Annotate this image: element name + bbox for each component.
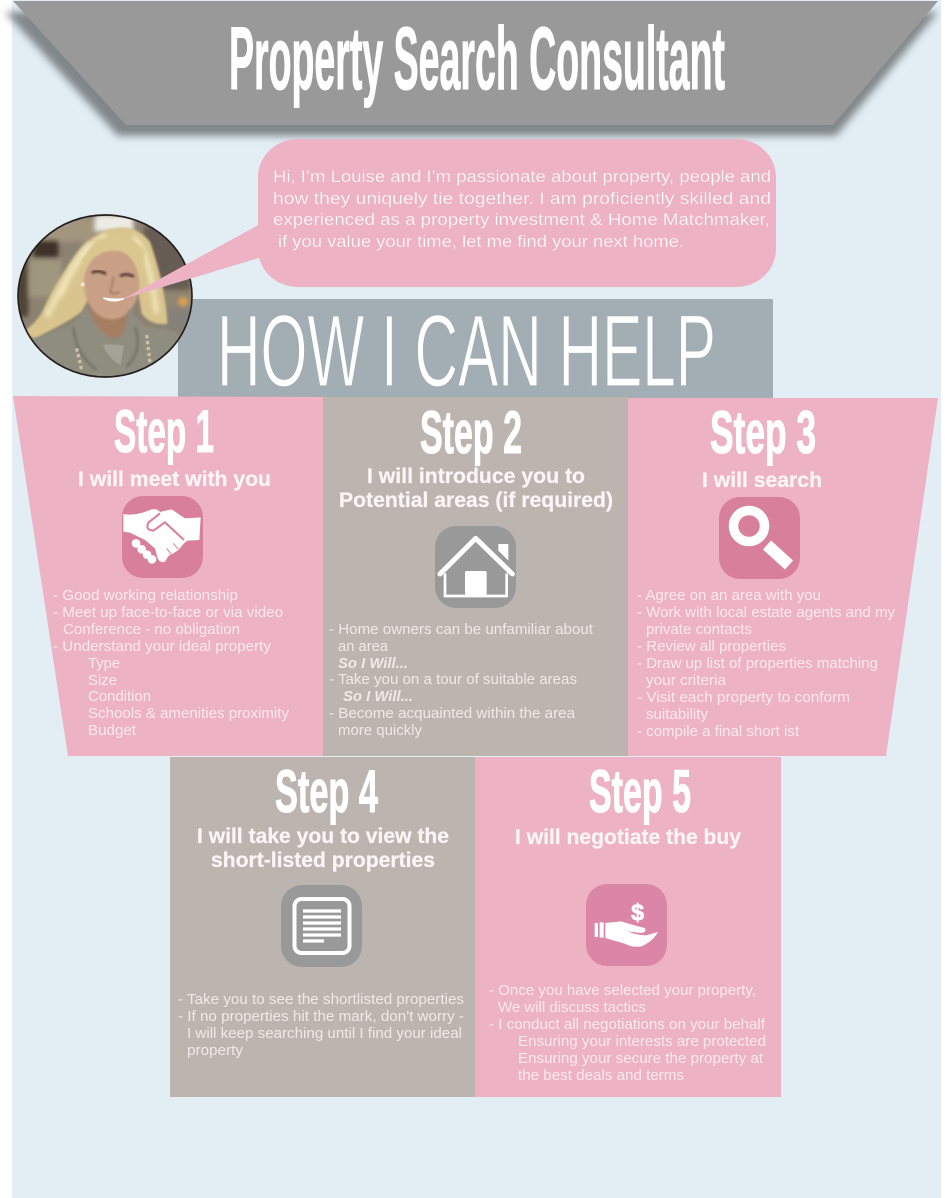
step 4 list: I will keep searching until I find your ideal [187, 1025, 462, 1042]
step 3 list: - Visit each property to conform [637, 689, 850, 706]
step 3 heading: Step 3 [710, 399, 816, 466]
step 2 list: - Become acquainted within the area [329, 705, 576, 722]
step 1 list: Size [88, 672, 117, 689]
panel: step 2 [323, 397, 628, 756]
panel: step 5 [475, 757, 781, 1097]
icon: document [281, 885, 362, 967]
step 2 subtitle: I will introduce you to [367, 465, 585, 488]
step 4 list [178, 991, 464, 1059]
step 1 list: Type [88, 655, 120, 672]
bubble text: if you value your time, let me find your next home. [278, 233, 684, 251]
step 3 list: suitability [646, 706, 708, 723]
step 2 list: an area [338, 638, 389, 655]
step 3 list: private contacts [646, 621, 752, 638]
step 1 subtitle: I will meet with you [78, 468, 271, 491]
step 2 list: So I Will... [338, 655, 408, 672]
step 3 list: - Work with local estate agents and my [637, 604, 895, 621]
step 2 list: - Take you on a tour of suitable areas [329, 671, 577, 688]
step 5 list: Ensuring your secure the property at [518, 1050, 764, 1067]
step 5 list: We will discuss tactics [498, 999, 646, 1016]
step 4 heading: Step 4 [275, 758, 378, 825]
icon: house [435, 526, 516, 608]
step 4 list: - If no properties hit the mark, don't worry - [178, 1008, 464, 1025]
title banner [5, 1, 938, 136]
bubble text: Hi, I’m Louise and I’m passionate about property, people and [273, 168, 771, 186]
speech bubble [123, 139, 776, 299]
step 3 list: - Draw up list of properties matching [637, 655, 878, 672]
step 2 subtitle [339, 465, 613, 512]
panel: step 3 [628, 398, 938, 756]
step 4 list: property [187, 1042, 244, 1059]
step 1 list: Condition [88, 688, 151, 705]
step 1 list: - Understand your ideal property [53, 638, 271, 655]
step 5 subtitle: I will negotiate the buy [515, 826, 741, 849]
step 5 list: - Once you have selected your property, [489, 982, 756, 999]
step 2 list: more quickly [338, 722, 422, 739]
step 1 heading: Step 1 [114, 398, 214, 465]
icon: magnifier [719, 497, 800, 579]
step 3 list: your criteria [646, 672, 727, 689]
panel: step 4 [170, 757, 475, 1097]
step 3 list [637, 587, 895, 740]
icon: hand with dollar [586, 884, 667, 966]
step 4 subtitle [197, 825, 449, 872]
step 5 list: - I conduct all negotiations on your behalf [489, 1016, 766, 1033]
step 3 list: - Agree on an area with you [637, 587, 821, 604]
bubble text: experienced as a property investment & Home Matchmaker, [273, 211, 770, 229]
step 1 list: Budget [88, 722, 137, 739]
step 2 list: - Home owners can be unfamiliar about [329, 621, 594, 638]
step 5 list: the best deals and terms [518, 1067, 684, 1084]
step 1 list: Schools & amenities proximity [88, 705, 289, 722]
step 5 heading: Step 5 [589, 758, 691, 825]
step 3 subtitle: I will search [702, 469, 822, 492]
step 2 list [329, 621, 594, 739]
portrait photo [13, 210, 197, 383]
step 4 subtitle: I will take you to view the [197, 825, 449, 848]
step 1 list [53, 587, 289, 739]
step 1 list: - Meet up face-to-face or via video [53, 604, 283, 621]
step 2 list: So I Will... [343, 688, 413, 705]
step 5 list [489, 982, 766, 1084]
step 1 list: - Good working relationship [53, 587, 238, 604]
panel: step 1 [13, 396, 323, 756]
step 1 list: Conference - no obligation [63, 621, 240, 638]
bubble text: how they uniquely tie together. I am proficiently skilled and [273, 190, 771, 208]
bubble text [273, 168, 771, 251]
step 2 heading: Step 2 [420, 399, 522, 466]
icon: handshake [122, 496, 203, 578]
step 5 list: Ensuring your interests are protected [518, 1033, 766, 1050]
icon: hand with dollar: $ [631, 899, 644, 925]
step 4 list: - Take you to see the shortlisted properties [178, 991, 464, 1008]
step 4 subtitle: short-listed properties [211, 849, 435, 872]
step 3 list: - compile a final short ist [637, 723, 800, 740]
step 3 list: - Review all properties [637, 638, 786, 655]
step 2 subtitle: Potential areas (if required) [339, 489, 613, 512]
